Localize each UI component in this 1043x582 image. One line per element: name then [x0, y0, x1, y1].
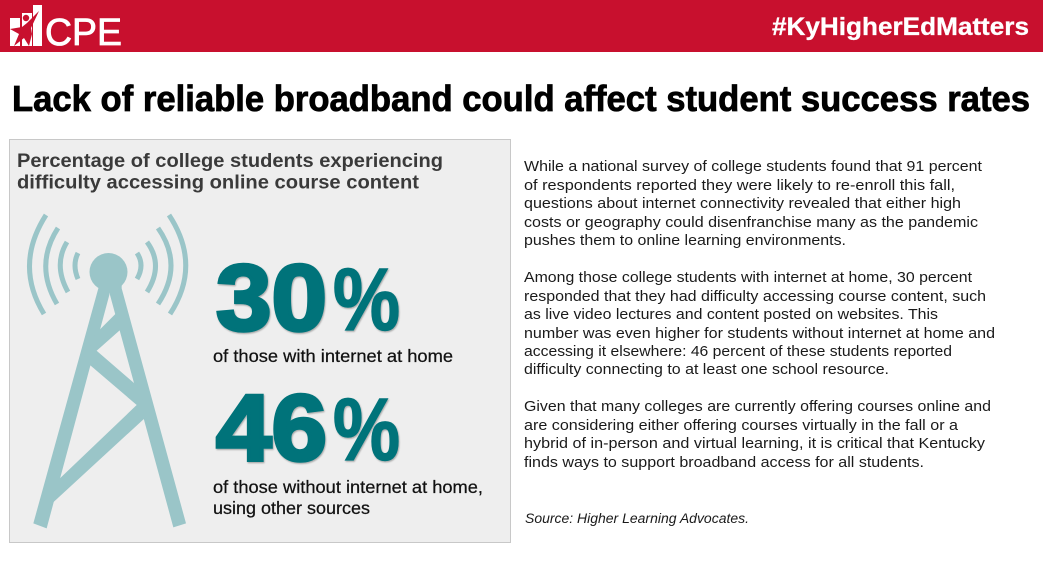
text block: paragraph 3: finds ways to support broadband access for all students.	[524, 454, 924, 471]
text block: paragraph 3	[524, 398, 991, 471]
text block: paragraph 1	[524, 158, 983, 249]
panel: student percentages	[10, 140, 510, 542]
stat: 46%: of those without internet at home,	[213, 477, 483, 497]
text block: paragraph 3: hybrid of in-person and virtual learning, it is critical that Kentucky	[524, 435, 986, 452]
text block: paragraph 1: costs or geography could disenfranchise many as the pandemic	[524, 214, 979, 231]
text block: paragraph 2	[524, 269, 995, 378]
text block: paragraph 2: Among those college students with internet at home, 30 percent	[524, 269, 973, 286]
text block: paragraph 1: While a national survey of college students found that 91 percent	[524, 158, 983, 175]
stat: 46%: %	[333, 380, 400, 479]
icon: broadcast tower	[29, 215, 186, 528]
text block: paragraph 1: of respondents reported they were likely to re-enroll this fall,	[524, 177, 955, 194]
panel heading: difficulty accessing online course content	[17, 172, 420, 194]
text block: paragraph 1: questions about internet connectivity revealed that either high	[524, 195, 961, 212]
stat: 46%	[213, 375, 483, 518]
stat: 46%: 46	[216, 375, 327, 480]
header band	[0, 0, 1043, 54]
panel heading: Percentage of college students experiencing	[17, 151, 443, 172]
text block: paragraph 2: accessing it elsewhere: 46 percent of these students reported	[524, 343, 952, 360]
stat: 46%: using other sources	[213, 498, 370, 518]
logo: CPE	[10, 5, 122, 54]
text block: paragraph 3: are considering either offering courses virtually in the fall or a	[524, 417, 959, 434]
logo: CPE: CPE	[45, 12, 122, 54]
panel heading	[17, 151, 443, 194]
text block: paragraph 2: as live video lectures and content posted on websites. This	[524, 306, 938, 323]
stat: 30%: of those with internet at home	[213, 346, 453, 366]
text block: paragraph 1: pushes them to online learning environments.	[524, 232, 846, 249]
source note: Source: Higher Learning Advocates.	[525, 511, 749, 526]
stat: 30%: 30	[216, 245, 327, 350]
hashtag: #KyHigherEdMatters	[772, 13, 1029, 41]
text block: paragraph 3: Given that many colleges are currently offering courses online and	[524, 398, 991, 415]
text block: paragraph 2: difficulty connecting to at least one school resource.	[524, 361, 889, 378]
stat: 30%	[213, 245, 453, 366]
text block: paragraph 2: responded that they had difficulty accessing course content, such	[524, 288, 986, 305]
stat: 30%: %	[333, 250, 400, 349]
text block: paragraph 2: number was even higher for students without internet at home and	[524, 325, 995, 342]
